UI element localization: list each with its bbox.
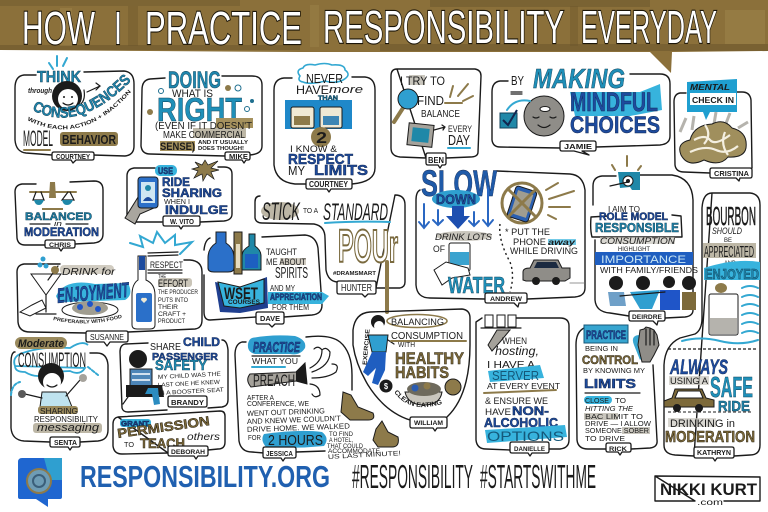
icon: tray with glasses xyxy=(481,315,521,351)
panel: role model responsible consumption: ROLE MODEL xyxy=(599,211,668,223)
panel: slow down, drink water, put phone away: * PUT THE xyxy=(505,227,550,237)
panel: share child passenger safety: SHARE xyxy=(150,342,181,353)
panel: drink for enjoyment and respect the effort: ENJOYMENT xyxy=(56,279,131,308)
panel: WSET courses: APPRECIATION xyxy=(270,292,322,302)
panel: use ride sharing: INDULGE xyxy=(165,203,228,217)
infographic canvas: #STARTSWITHME xyxy=(480,458,596,495)
panel: role model responsible consumption: RESPONSIBLE xyxy=(595,220,679,235)
panel: grant permission to teach: GRANT xyxy=(121,419,149,428)
panel: I try to find balance: FIND xyxy=(417,93,444,108)
panel: role model responsible consumption: IMPORTANCE xyxy=(601,254,686,266)
panel: drink for enjoyment and respect the effort: PUTS INTO xyxy=(158,298,188,304)
panel: balanced in moderation: MODERATION xyxy=(24,225,99,239)
panel: share child passenger safety: LAST ONE HE KNEW xyxy=(158,380,220,389)
panel: doing what is right xyxy=(141,67,262,163)
name tag: Hunter xyxy=(337,281,376,297)
panel: drink for enjoyment and respect the effort: THEIR xyxy=(158,305,179,311)
panel: practice being in control: BY KNOWING MY xyxy=(583,366,645,375)
panel: practice what you preach: A HOTEL, xyxy=(329,437,353,444)
icon: two whiskey glasses xyxy=(285,100,352,129)
panel: practice being in control: CONTROL xyxy=(582,353,638,367)
panel: balancing consumption with healthy habits: BALANCING xyxy=(391,317,444,327)
icon: calendar xyxy=(407,123,434,147)
name tag: Susanne: SUSANNE xyxy=(90,333,124,342)
title banner: I xyxy=(114,2,122,54)
panel: I try to find balance: I TRY TO xyxy=(400,74,445,88)
panel: practice being in control: SOMEONE SOBER xyxy=(585,428,649,435)
icon: hand holding water xyxy=(434,243,470,285)
illustration: family and friends xyxy=(608,276,696,310)
panel: when hosting have a server: NON- xyxy=(512,404,549,418)
panel: practice what you preach: DRIVE HOME. WE WALKED xyxy=(247,421,351,434)
panel: moderate consumption: Moderate xyxy=(18,338,64,350)
panel: slow down, drink water, put phone away: OF xyxy=(433,244,445,254)
name tag: William: WILLIAM xyxy=(414,421,443,427)
panel: balancing consumption with healthy habits: WITH xyxy=(398,342,415,349)
panel: by making mindful choices: MINDFUL xyxy=(570,87,658,117)
panel: practice what you preach: AFTER A xyxy=(247,393,274,402)
panel: drink for enjoyment and respect the effort: EFFORT xyxy=(158,278,188,290)
icon: phone with no sign xyxy=(502,183,574,223)
pour lettering: POUr xyxy=(338,220,398,272)
icon: plate of food xyxy=(62,301,118,318)
name tag: Cristina: CRISTINA xyxy=(714,171,749,178)
icon: balance scale xyxy=(30,182,76,210)
panel: role model responsible consumption: WITH FAMILY/FRIENDS xyxy=(600,265,698,275)
panel: doing what is right: RIGHT xyxy=(157,91,242,128)
name tag: Ben: BEN xyxy=(428,156,444,165)
panel: practice what you preach: FOR xyxy=(248,433,261,442)
name tag: Brandy: BRANDY xyxy=(171,398,204,407)
panel: bourbon and always using a safe ride: USING A xyxy=(670,376,709,387)
panel: practice what you preach: WENT OUT DRINKING xyxy=(247,406,325,418)
panel: use ride sharing: RIDE xyxy=(162,175,190,189)
panel: never have more than 2: THAN xyxy=(318,95,338,102)
panel: balanced in moderation: BALANCED xyxy=(25,211,92,223)
panel: doing what is right: DOING xyxy=(168,67,221,94)
panel: when hosting have a server: ALCOHOLIC xyxy=(484,415,559,430)
panel: by making mindful choices: MAKING xyxy=(533,63,625,94)
panel: doing what is right: AND IT USUALLY xyxy=(198,140,248,146)
title banner: HOW xyxy=(22,2,95,54)
icon: hand with phone xyxy=(125,177,158,224)
panel: stick to a standard pour: TO A xyxy=(303,208,318,215)
panel: practice being in control: DRIVE — I ALLOW xyxy=(585,421,651,428)
panel: drink for enjoyment and respect the effort: PRODUCT xyxy=(158,319,185,325)
panel: drink for enjoyment and respect the effort: DRINK for xyxy=(62,267,116,278)
name tag: Susanne xyxy=(86,331,128,346)
credit: nikki kurt logo: NIKKI KURT xyxy=(660,480,758,499)
panel: share child passenger safety: PASSENGER xyxy=(152,352,219,363)
website: responsibility.org: RESPONSIBILITY.ORG xyxy=(80,459,330,494)
panel: moderate consumption: RESPONSIBILITY xyxy=(34,415,99,424)
panel: practice being in control: CLOSE xyxy=(585,398,609,405)
panel: slow down, drink water, put phone away xyxy=(416,163,585,307)
title banner xyxy=(0,0,768,73)
icon: magnifying glass xyxy=(394,89,418,122)
panel: practice what you preach xyxy=(235,335,401,461)
name tag: Jamie xyxy=(560,141,596,155)
panel: by making mindful choices: CHOICES xyxy=(570,112,660,139)
icon: bowl of healthy food xyxy=(405,382,442,405)
panel: when hosting have a server: & ENSURE WE xyxy=(485,396,548,406)
panel: when hosting have a server: AT EVERY EVENT xyxy=(487,382,560,391)
panel: practice being in control: TO DRIVE xyxy=(585,436,625,443)
panel: use ride sharing: USE xyxy=(158,166,173,176)
panel: slow down, drink water, put phone away: DRINK LOTS xyxy=(435,232,492,242)
panel: practice being in control xyxy=(576,325,659,455)
panel: practice what you preach: AND KNEW WE COULDN'T xyxy=(247,414,341,426)
panel: role model responsible consumption xyxy=(591,156,698,325)
panel: think through consequences: BEHAVIOR xyxy=(62,132,116,147)
icon: open book: WSET xyxy=(224,284,258,303)
icon: safe car xyxy=(664,389,714,412)
panel: grant permission to teach: TO xyxy=(124,442,135,449)
panel: balancing consumption with healthy habits: HEALTHY xyxy=(395,349,465,368)
panel: bourbon and always using a safe ride: BE xyxy=(724,238,732,244)
panel: never have more than 2 xyxy=(274,64,375,192)
panel: doing what is right: MAKE COMMERCIAL xyxy=(163,130,245,141)
panel: practice what you preach: WHAT YOU xyxy=(252,356,298,366)
panel: doing what is right: WHAT IS xyxy=(172,88,213,100)
panel: practice being in control: TO xyxy=(615,398,627,405)
panel: share child passenger safety: CHILD xyxy=(183,335,220,349)
panel: I try to find balance xyxy=(391,69,481,168)
panel: role model responsible consumption: CONSUMPTION xyxy=(600,236,676,246)
panel: I try to find balance: DAY xyxy=(448,132,470,149)
illustration: child in booster seat xyxy=(123,350,164,405)
panel: share child passenger safety: IN A BOOSTER SEAT xyxy=(158,388,224,397)
panel: moderate consumption: CONSUMPTION xyxy=(18,349,86,372)
name tag: Danielle: DANIELLE xyxy=(514,447,545,453)
title banner: PRACTICE xyxy=(145,2,302,54)
icon: megaphone: PREACH xyxy=(253,371,295,390)
panel: grant permission to teach xyxy=(113,411,225,459)
name tag: Rick: RICK xyxy=(609,446,627,453)
panel: moderate consumption: SHARING xyxy=(40,407,78,416)
icon: megaphone xyxy=(248,363,307,390)
panel: when hosting have a server: hosting, xyxy=(495,344,539,358)
panel: role model responsible consumption: I AIM TO xyxy=(608,205,640,214)
illustration: woman sharing message xyxy=(11,363,98,407)
name tag: Courtney: COURTNEY xyxy=(309,180,349,189)
panel: bourbon and always using a safe ride: AND xyxy=(724,261,737,267)
icon: mindful head xyxy=(507,96,564,136)
name tag: Andrew: ANDREW xyxy=(490,296,523,303)
panel: mental check in xyxy=(674,79,752,181)
name tag: Hunter: HUNTER xyxy=(341,283,372,294)
panel: practice what you preach: 2 HOURS xyxy=(268,432,323,449)
panel: drink for enjoyment and respect the effort xyxy=(16,230,203,347)
panel: practice being in control: HITTING THE xyxy=(585,406,633,413)
panel: share child passenger safety: SAFETY xyxy=(155,357,207,374)
panel: moderate consumption xyxy=(11,337,108,450)
panel: use ride sharing xyxy=(125,160,232,229)
panel: balancing consumption with healthy habits xyxy=(352,308,471,432)
panel: never have more than 2: 2 xyxy=(316,130,327,147)
icon: coin: $ xyxy=(384,382,388,391)
panel: when hosting have a server: HAVE xyxy=(485,407,511,417)
credit: nikki kurt logo: .com xyxy=(697,498,723,507)
panel: never have more than 2: I KNOW & xyxy=(290,144,338,155)
panel: balanced in moderation: in xyxy=(54,221,62,228)
panel: slow down, drink water, put phone away: DOWN xyxy=(436,191,476,207)
panel: drink for enjoyment and respect the effort: THE PRODUCER xyxy=(158,290,199,296)
icon: open book xyxy=(215,277,268,313)
panel: practice being in control: BAC LIMIT TO xyxy=(585,414,644,421)
panel: practice what you preach: PRACTICE xyxy=(253,339,301,356)
panel: practice being in control: BEING IN xyxy=(585,344,618,353)
panel: when hosting have a server: I HAVE A xyxy=(487,360,535,371)
icon: burst xyxy=(192,160,219,181)
name tag: Deirdre xyxy=(629,311,665,325)
panel: slow down, drink water, put phone away: away xyxy=(548,238,576,247)
panel: use ride sharing: WHEN I xyxy=(164,199,190,206)
panel: slow down, drink water, put phone away: WATER xyxy=(448,272,505,298)
panel: role model responsible consumption: HIGHLIGHT xyxy=(618,247,650,253)
icon: checkbox xyxy=(500,110,517,128)
panel: WSET courses: ME ABOUT xyxy=(266,257,306,267)
panel: drink for enjoyment and respect the effort: RESPECT xyxy=(150,260,183,270)
panel: bourbon and always using a safe ride: SHOULD xyxy=(712,226,742,236)
panel: practice being in control: PRACTICE xyxy=(586,328,626,342)
panel: grant permission to teach: others xyxy=(187,432,220,443)
panel: mental check in: CHECK IN xyxy=(692,96,734,105)
panel: never have more than 2: HAVE xyxy=(296,83,329,97)
panel: balancing consumption with healthy habits: EXERCISE xyxy=(363,329,372,365)
icon: walking shoes xyxy=(341,392,398,447)
panel: grant permission to teach: PERMISSION xyxy=(116,413,211,441)
panel: think through consequences: THINK xyxy=(37,69,81,86)
panel: practice what you preach: CONFERENCE, WE xyxy=(247,399,309,408)
panel: I try to find balance: BALANCE xyxy=(421,109,460,120)
icon: apple xyxy=(445,379,461,395)
logo: responsibility speech bubble xyxy=(18,458,62,507)
panel: WSET courses xyxy=(204,232,329,327)
panel: think through consequences: WITH EACH ACTION + INACTION xyxy=(28,90,131,130)
panel: when hosting have a server xyxy=(476,315,569,456)
name tag: Danielle xyxy=(510,442,549,456)
panel: stick to a standard pour: STICK xyxy=(262,198,301,226)
panel: doing what is right: (EVEN IF IT DOESN'T xyxy=(155,120,253,132)
name tag: Dave: DAVE xyxy=(260,314,280,323)
panel: mental check in: MENTAL xyxy=(690,83,730,92)
panel: doing what is right: SENSE) xyxy=(160,141,195,153)
name tag: Kathryn: KATHRYN xyxy=(697,450,731,457)
panel: slow down, drink water, put phone away: PHONE xyxy=(513,237,546,247)
panel: WSET courses: AND MY xyxy=(270,284,296,293)
panel: stick to a standard pour: #DRAMSMART xyxy=(333,271,377,277)
name tag: W. Vito: W. VITO xyxy=(170,217,194,226)
name tag: Mike: MIKE xyxy=(229,154,248,161)
panel: when hosting have a server: WHEN xyxy=(502,336,527,346)
panel: bourbon and always using a safe ride: DRINKING in xyxy=(670,418,735,430)
name tag: Jessica: JESSICA xyxy=(266,451,293,458)
icon: bottles xyxy=(208,232,261,274)
panel: bourbon and always using a safe ride xyxy=(664,193,760,461)
panel: never have more than 2: LIMITS xyxy=(314,162,368,179)
panel: practice being in control: LIMITS xyxy=(584,376,636,391)
panel: balanced in moderation xyxy=(15,181,103,251)
icon: target xyxy=(610,172,640,190)
icon: open book: COURSES xyxy=(228,300,260,306)
panel: I try to find balance: EVERY xyxy=(448,124,472,134)
icon: car xyxy=(523,260,584,285)
panel: practice what you preach: THAT COULD xyxy=(327,443,363,450)
panel: drink for enjoyment and respect the effort: CRAFT + xyxy=(158,312,187,318)
icon: thinking woman xyxy=(52,81,100,111)
panel: never have more than 2: NEVER xyxy=(306,71,343,86)
panel: think through consequences: CONSEQUENCES xyxy=(34,74,130,118)
credit: nikki kurt logo xyxy=(655,476,760,507)
icon: spirit bottle xyxy=(132,256,155,329)
panel: WSET courses: TAUGHT xyxy=(266,247,297,257)
panel: drink for enjoyment and respect the effort: THE xyxy=(158,274,166,280)
panel: never have more than 2: MY xyxy=(288,163,305,178)
panel: by making mindful choices: BY xyxy=(511,73,524,88)
icon: martini and hand xyxy=(20,256,61,316)
panel: when hosting have a server: SERVER xyxy=(492,368,539,383)
panel: stick to a standard pour xyxy=(255,195,405,312)
arrows pointing down xyxy=(419,188,493,229)
panel: bourbon and always using a safe ride: ALWAYS xyxy=(669,356,728,379)
title banner: RESPONSIBILITY xyxy=(323,1,564,53)
panel: slow down, drink water, put phone away: WHILE DRIVING xyxy=(510,246,578,256)
name tag: Kathryn xyxy=(694,447,734,461)
panel: grant permission to teach: TEACH xyxy=(140,435,185,451)
icon: stop hand xyxy=(633,327,659,362)
panel: stick to a standard pour: STANDARD xyxy=(323,199,388,226)
panel: think through consequences: MODEL xyxy=(23,126,53,151)
name tag: Deborah: DEBORAH xyxy=(171,449,205,456)
panel: moderate consumption: messaging xyxy=(37,422,100,434)
panel: balancing consumption with healthy habits: HABITS xyxy=(395,363,449,382)
panel: practice what you preach: TO FIND xyxy=(329,431,353,438)
panel: never have more than 2: RESPECT xyxy=(288,151,353,168)
panel: balancing consumption with healthy habits: CLEAN EATING xyxy=(395,390,442,408)
panel: when hosting have a server: OPTIONS xyxy=(487,428,564,444)
name tag: Jamie: JAMIE xyxy=(564,142,592,151)
illustration: exercising person xyxy=(363,315,394,385)
name tag: Andrew xyxy=(485,293,527,307)
panel: drink for enjoyment and respect the effort: PREFERABLY WITH FOOD xyxy=(53,314,122,324)
panel: practice what you preach: US LAST MINUTE! xyxy=(328,450,401,461)
name tag: Deirdre: DEIRDRE xyxy=(632,314,663,321)
panel: practice what you preach: ACCOMMODATE xyxy=(328,448,381,455)
pour lettering xyxy=(338,220,398,312)
name tag: Jessica xyxy=(263,447,296,461)
panel: doing what is right: DOES THOUGH! xyxy=(198,146,244,152)
panel: share child passenger safety: MY CHILD WAS THE xyxy=(158,372,221,381)
panel: share child passenger safety xyxy=(120,335,228,412)
panel: never have more than 2: more xyxy=(329,84,363,96)
panel: balancing consumption with healthy habits: CONSUMPTION xyxy=(391,331,463,342)
panel: think through consequences: through xyxy=(28,88,52,95)
panel: use ride sharing: SHARING xyxy=(162,186,222,200)
icon: glass and waves xyxy=(682,283,758,343)
icon: brain xyxy=(680,122,746,163)
panel: bourbon and always using a safe ride: RIDE xyxy=(718,398,750,415)
panel: by making mindful choices xyxy=(492,63,670,155)
name tag: Senta: SENTA xyxy=(54,440,77,447)
panel: slow down, drink water, put phone away: SLOW xyxy=(421,163,497,204)
name tag: Courtney: COURTNEY xyxy=(56,154,90,161)
name tag: Chris: CHRIS xyxy=(49,242,72,249)
panel: think through consequences xyxy=(14,55,135,164)
icon: teal crown burst xyxy=(130,232,192,254)
panel: WSET courses: SPIRITS xyxy=(275,265,308,282)
infographic canvas: #RESPONSIBILITY xyxy=(352,458,473,495)
panel: WSET courses: FOR THEM xyxy=(272,303,309,312)
